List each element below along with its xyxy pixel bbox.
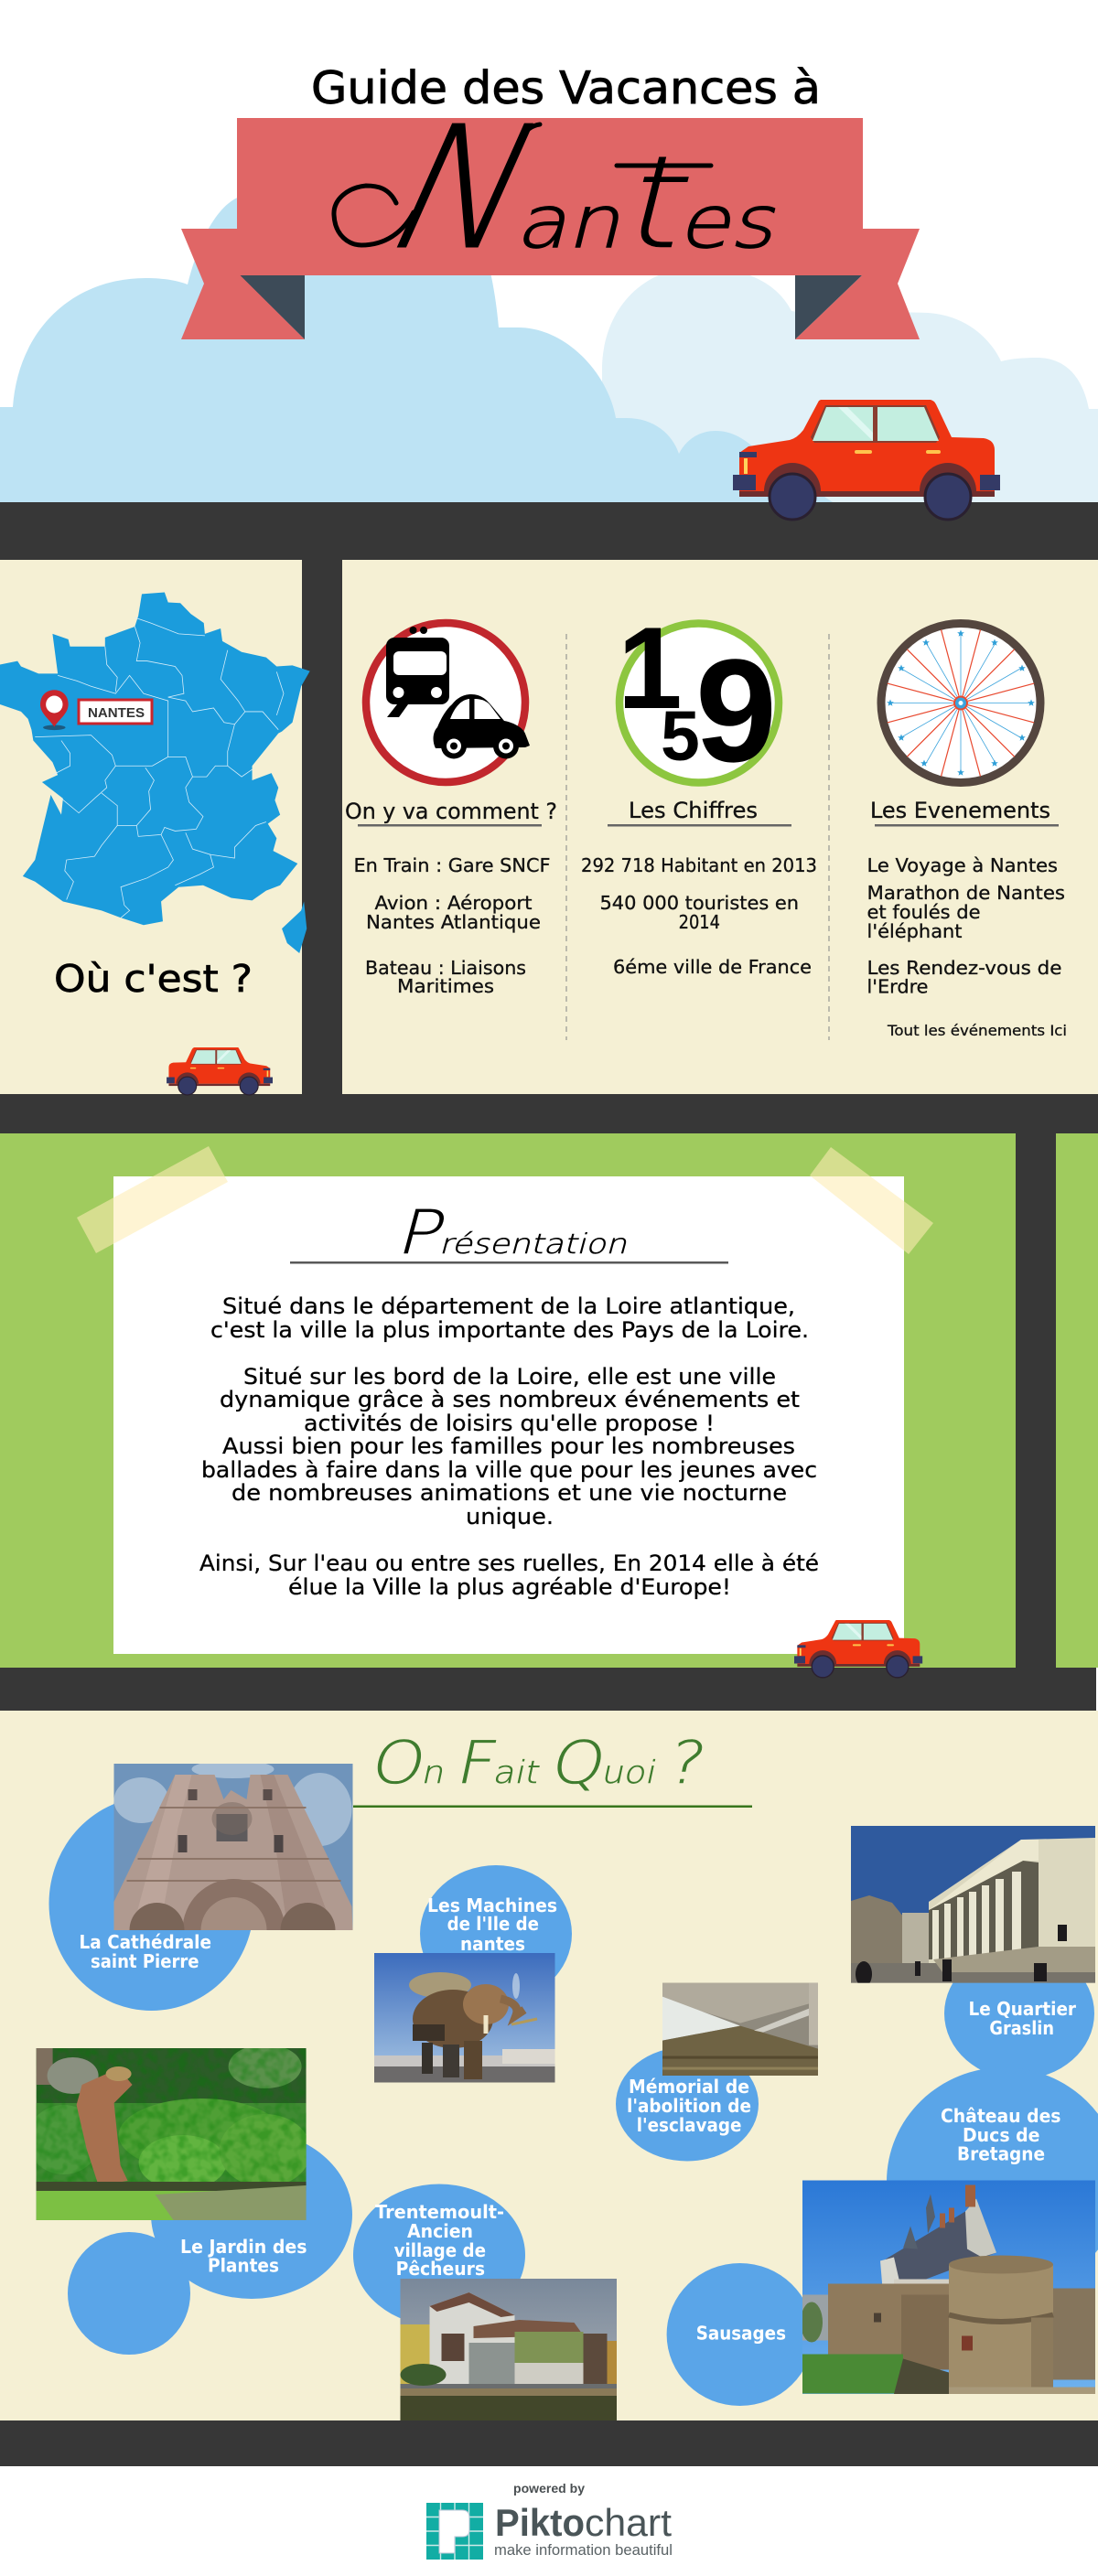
footer: powered by Piktochart (426, 2481, 673, 2560)
bubble: jardin des plantes: Le Jardin des (180, 2236, 307, 2258)
column: on y va comment: Bateau : Liaisons (365, 957, 526, 979)
bubble: sausages (667, 2263, 813, 2406)
banner title: Nantes: antes (508, 129, 802, 278)
bubble: memorial: l'abolition de (627, 2095, 751, 2117)
presentation text: élue la Ville la plus agréable d'Europe! (288, 1574, 731, 1600)
photo: trentemoult (401, 2279, 617, 2420)
column: les evenements: Marathon de Nantes (867, 882, 1065, 904)
icon: figures 1 5 9 (618, 603, 779, 792)
column separators (566, 634, 829, 1040)
bubble: chateau des ducs: Bretagne (957, 2143, 1045, 2165)
label: NANTES: NANTES (88, 705, 145, 721)
column: les evenements: Les Rendez-vous de (867, 957, 1061, 979)
panel: info background (342, 560, 1098, 1094)
bubble: chateau des ducs: Château des (941, 2105, 1061, 2127)
small car on presentation card (794, 1620, 922, 1678)
bubble: les machines: Les Machines (427, 1894, 557, 1916)
bubble: memorial: Mémorial de (629, 2076, 749, 2098)
photo: elephant (374, 1953, 554, 2082)
banner ribbon (181, 118, 920, 339)
presentation text (199, 1293, 819, 1600)
panel: presentation green background (0, 1133, 1098, 1668)
presentation text: dynamique grâce à ses nombreux événements et (220, 1387, 800, 1412)
panel: map background (0, 560, 302, 1094)
road network (0, 502, 1098, 2466)
column: les evenements: l'Erdre (867, 975, 928, 997)
footer: powered by Piktochart: make information beautiful (494, 2541, 673, 2559)
banner title: Nantes (334, 90, 802, 287)
bubble: sausages: Sausages (696, 2323, 786, 2345)
photo: cathedrale (113, 1764, 353, 1930)
photo: graslin theatre (851, 1826, 1095, 1983)
dark cloud (0, 197, 833, 502)
heading: Où c'est ?: Où c'est ? (54, 957, 253, 1001)
bubble: jardin des plantes (68, 2131, 352, 2355)
column: on y va comment: Nantes Atlantique (366, 911, 541, 933)
icon: bicycle wheel (881, 624, 1040, 783)
column: les evenements: Tout les événements Ici (887, 1022, 1067, 1039)
column: on y va comment: On y va comment ? (345, 799, 557, 824)
presentation text: activités de loisirs qu'elle propose ! (304, 1411, 715, 1436)
icon: train and car (366, 623, 530, 782)
map of France (0, 592, 310, 953)
column: les evenements: Les Evenements (870, 798, 1050, 823)
photo: memorial (662, 1983, 818, 2076)
presentation text: Ainsi, Sur l'eau ou entre ses ruelles, En 2014 elle à été (199, 1551, 819, 1576)
presentation text: unique. (466, 1504, 554, 1530)
icon: figures 1 5 9: 1 (618, 603, 683, 733)
bubble: trentemoult (353, 2184, 525, 2325)
sky background (0, 0, 1098, 502)
photo: chateau (802, 2181, 1095, 2394)
panel: presentation card (113, 1176, 904, 1654)
column: les chiffres: 292 718 Habitant en 2013 (581, 854, 817, 876)
column: les evenements: Le Voyage à Nantes (867, 854, 1058, 876)
presentation text: de nombreuses animations et une vie nocturne (231, 1480, 787, 1506)
bubble: memorial: l'esclavage (637, 2114, 741, 2136)
column: les evenements: l'éléphant (867, 920, 963, 942)
bubble: trentemoult: Trentemoult- (375, 2201, 504, 2223)
column: on y va comment: Maritimes (397, 975, 494, 997)
bubble: trentemoult: village de (394, 2239, 486, 2261)
footer: powered by Piktochart: Pikto (495, 2501, 585, 2544)
bubble: les machines: nantes (460, 1933, 525, 1955)
presentation text: ballades à faire dans la ville que pour les jeunes avec (201, 1457, 817, 1483)
photo: jardin (37, 2048, 307, 2220)
icon: Piktochart logo (426, 2503, 483, 2560)
label: quartier graslin: Graslin (989, 2017, 1054, 2039)
banner title: Nantes: N (359, 90, 574, 287)
column: on y va comment (345, 799, 557, 997)
column: on y va comment: Avion : Aéroport (375, 892, 533, 914)
bubble: les machines: de l'Ile de (447, 1913, 539, 1935)
presentation text: Aussi bien pour les familles pour les nombreuses (222, 1433, 795, 1459)
footer: powered by Piktochart: powered by (513, 2481, 585, 2496)
footer: powered by Piktochart: chart (585, 2501, 672, 2544)
column: les chiffres: 6éme ville de France (613, 956, 812, 978)
label: quartier graslin (968, 1998, 1076, 2039)
column: on y va comment: En Train : Gare SNCF (353, 854, 551, 876)
column: les evenements (867, 798, 1067, 1039)
bubble: chateau des ducs: Ducs de (963, 2124, 1039, 2146)
presentation text: Situé dans le département de la Loire atlantique, (222, 1293, 795, 1319)
column: les evenements: et foulés de (867, 901, 981, 923)
presentation text: Situé sur les bord de la Loire, elle est une ville (243, 1364, 776, 1390)
title: Guide des Vacances à (311, 62, 821, 114)
label: quartier graslin: Le Quartier (968, 1998, 1076, 2020)
bubble: trentemoult: Pêcheurs (396, 2258, 485, 2280)
bubble: les machines (420, 1865, 572, 2002)
icon: figures 1 5 9: 9 (695, 628, 777, 792)
bubble: jardin des plantes: Plantes (208, 2254, 279, 2276)
light cloud (602, 267, 1098, 502)
bubble: chateau des ducs (887, 2067, 1098, 2296)
column: les chiffres (581, 798, 817, 978)
bubble: cathedrale: La Cathédrale (79, 1931, 211, 1953)
panel: activities background (0, 1711, 1098, 2420)
bubble: memorial (616, 2047, 759, 2161)
label: NANTES (79, 700, 152, 724)
bubble: quartier graslin (944, 1948, 1094, 2079)
bubble: cathedrale (49, 1797, 254, 2011)
big car on the road (733, 400, 1000, 520)
bubble: cathedrale: saint Pierre (91, 1950, 199, 1972)
tape left (77, 1146, 228, 1253)
presentation text: c'est la ville la plus importante des Pays de la Loire. (210, 1317, 809, 1343)
bubble: trentemoult: Ancien (407, 2220, 473, 2242)
small car in map panel (167, 1047, 273, 1095)
tape right (810, 1147, 933, 1254)
column: les chiffres: 2014 (679, 911, 720, 933)
column: les chiffres: Les Chiffres (629, 798, 758, 823)
icon: figures 1 5 9: 5 (661, 697, 700, 776)
heading: Présentation: Présentation (392, 1197, 641, 1268)
column: les chiffres: 540 000 touristes en (600, 892, 799, 914)
heading: On Fait Quoi ?: On Fait Quoi ? (366, 1730, 712, 1798)
